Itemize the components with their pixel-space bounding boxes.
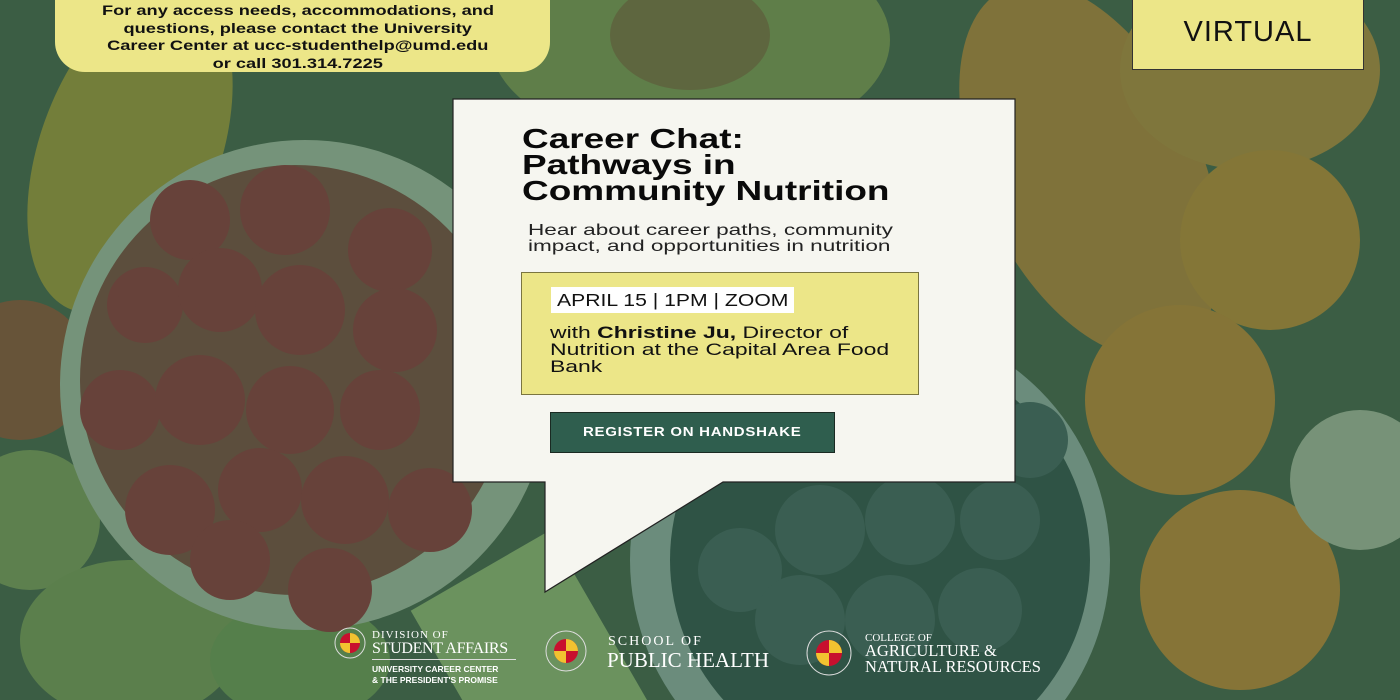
logo: agriculture & natural resources: COLLEGE OF <box>865 632 932 644</box>
button: register: REGISTER ON HANDSHAKE <box>583 425 801 439</box>
button: register <box>550 412 835 453</box>
subtitle: impact, and opportunities in nutrition <box>528 238 890 255</box>
speaker text <box>550 324 889 376</box>
callout: access needs pill: Career Center at ucc-studenthelp@umd.edu <box>107 38 488 53</box>
logo: agriculture & natural resources: NATURAL RESOURCES <box>865 657 1041 676</box>
logo: student affairs <box>334 628 516 685</box>
logo: school of public health: PUBLIC HEALTH <box>607 648 769 672</box>
subtitle <box>528 222 893 255</box>
logos row <box>334 628 1041 685</box>
speaker text: Bank <box>550 358 602 376</box>
logo: agriculture & natural resources <box>806 630 1041 676</box>
callout: access needs pill: or call 301.314.7225 <box>213 56 383 70</box>
event details box <box>521 272 919 395</box>
callout: access needs pill: For any access needs, accommodations, and <box>102 3 494 18</box>
callout: access needs pill: questions, please contact the University <box>124 20 472 36</box>
speaker text: Nutrition at the Capital Area Food <box>550 341 889 359</box>
speaker text: with Christine Ju, Director of <box>550 324 848 342</box>
title <box>522 123 890 206</box>
title: Pathways in <box>522 149 736 180</box>
logo: school of public health: SCHOOL OF <box>608 634 703 649</box>
title: Community Nutrition <box>522 175 890 206</box>
title: Career Chat: <box>522 123 744 154</box>
date tag: APRIL 15 | 1PM | ZOOM <box>557 290 788 310</box>
logo: student affairs: STUDENT AFFAIRS <box>372 640 508 657</box>
panel: speech bubble <box>452 98 1016 593</box>
badge: virtual: VIRTUAL <box>1184 16 1312 48</box>
subtitle: Hear about career paths, community <box>528 222 893 239</box>
logo: agriculture & natural resources: AGRICULTURE & <box>865 641 997 660</box>
logo: student affairs: UNIVERSITY CAREER CENTER <box>372 664 498 674</box>
logo: student affairs: & THE PRESIDENT'S PROMISE <box>372 675 498 685</box>
logo: student affairs: DIVISION OF <box>372 629 449 641</box>
logo: school of public health <box>546 630 769 672</box>
badge: virtual <box>1132 0 1364 70</box>
callout: access needs pill <box>55 0 550 72</box>
